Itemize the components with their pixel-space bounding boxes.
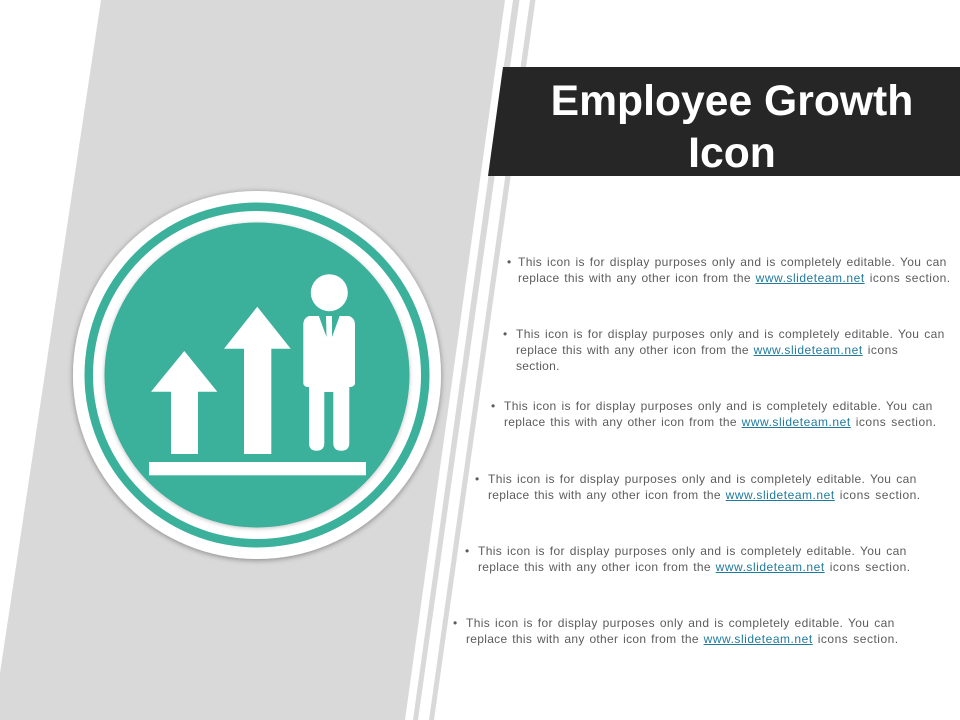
text block 1: This icon is for display purposes only and is completely editable. You can bbox=[518, 255, 947, 269]
text block 4: replace this with any other icon from the www.slideteam.net icons section. bbox=[488, 488, 921, 502]
icon: tall arrow bbox=[224, 307, 291, 454]
text block 3: This icon is for display purposes only and is completely editable. You can bbox=[504, 399, 933, 413]
outer white disc bbox=[73, 191, 441, 559]
text block 3 bbox=[491, 399, 937, 429]
text: • bbox=[465, 544, 470, 558]
text block 6: This icon is for display purposes only and is completely editable. You can bbox=[466, 616, 895, 630]
text block 5: replace this with any other icon from the www.slideteam.net icons section. bbox=[478, 560, 911, 574]
text: • bbox=[453, 616, 458, 630]
teal disc bbox=[104, 222, 410, 528]
text: • bbox=[507, 255, 512, 269]
icon: baseline bar bbox=[149, 462, 366, 475]
teal ring bbox=[84, 202, 430, 548]
text block 3: replace this with any other icon from the www.slideteam.net icons section. bbox=[504, 415, 937, 429]
text block 2: This icon is for display purposes only and is completely editable. You can bbox=[516, 327, 945, 341]
text block 2: replace this with any other icon from the www.slideteam.net icons bbox=[516, 343, 898, 357]
text block 2 bbox=[503, 327, 945, 373]
text block 4: This icon is for display purposes only and is completely editable. You can bbox=[488, 472, 917, 486]
text block 2: section. bbox=[516, 359, 560, 373]
inner white ring bbox=[93, 211, 421, 539]
text block 5 bbox=[465, 544, 911, 574]
text block 1: replace this with any other icon from the www.slideteam.net icons section. bbox=[518, 271, 951, 285]
title: Icon bbox=[688, 129, 776, 177]
text block 1 bbox=[507, 255, 951, 285]
title: Employee Growth bbox=[551, 77, 913, 125]
icon: person bbox=[303, 274, 355, 451]
text block 4 bbox=[475, 472, 921, 502]
text block 6 bbox=[453, 616, 899, 646]
text: • bbox=[503, 327, 508, 341]
text block 5: This icon is for display purposes only and is completely editable. You can bbox=[478, 544, 907, 558]
text: • bbox=[491, 399, 496, 413]
icon: small arrow bbox=[151, 351, 217, 454]
text: • bbox=[475, 472, 480, 486]
title bbox=[551, 77, 913, 177]
text block 6: replace this with any other icon from the www.slideteam.net icons section. bbox=[466, 632, 899, 646]
